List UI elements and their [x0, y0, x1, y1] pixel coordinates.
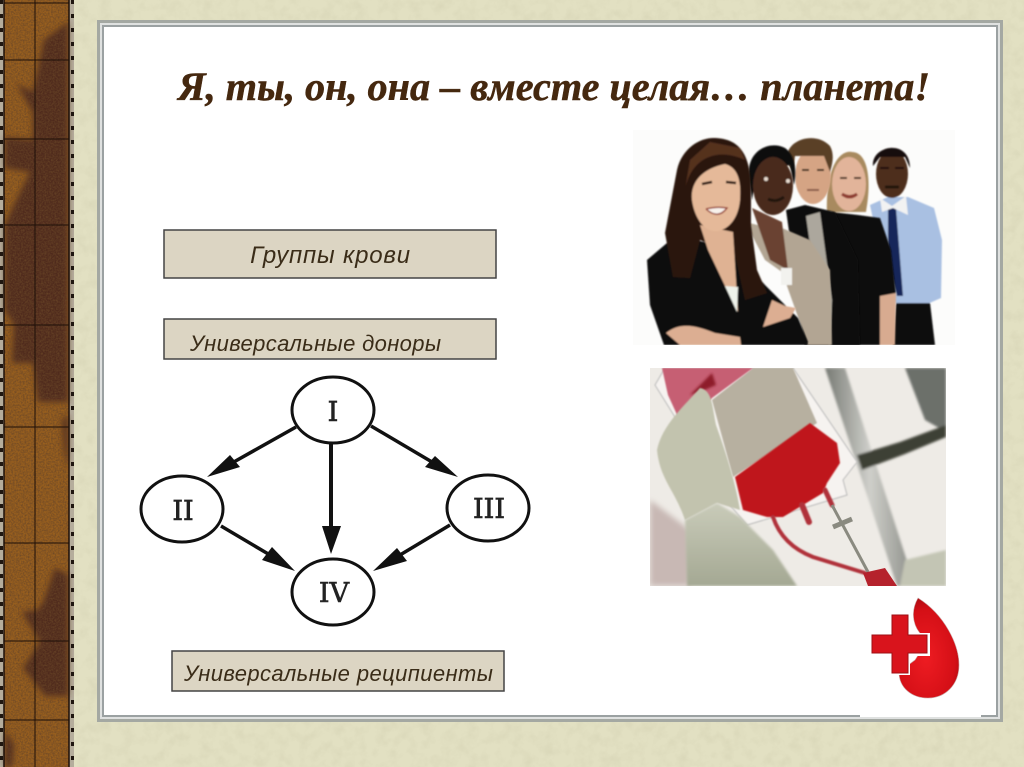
node I: I — [328, 397, 338, 428]
node III — [447, 475, 529, 541]
node IV — [292, 559, 374, 625]
node III: III — [473, 494, 505, 525]
node IV: IV — [319, 578, 350, 609]
label box: blood groups: Группы крови — [250, 242, 411, 269]
woman in beige jacket — [745, 145, 832, 345]
pink top of bag — [661, 368, 753, 414]
label box: universal recipients: Универсальные реципиенты — [183, 661, 493, 686]
node II — [141, 476, 223, 542]
photo: blood bag — [650, 368, 946, 586]
left soft background — [650, 500, 690, 586]
bag outline — [655, 368, 857, 525]
arrow: II to IV — [221, 526, 295, 571]
white patch over frame — [860, 700, 981, 717]
label box: blood groups — [164, 230, 496, 278]
arrow: III to IV — [373, 525, 450, 571]
photo: group of people — [646, 136, 943, 345]
decorative left border band — [0, 0, 74, 767]
icon: blood drop with cross — [870, 598, 959, 698]
blood group compatibility diagram — [141, 377, 529, 625]
gloved hand — [657, 388, 740, 520]
front woman — [647, 138, 808, 345]
right man — [870, 148, 942, 345]
tubes — [773, 490, 865, 573]
background pole and strap — [825, 368, 946, 586]
bag label — [712, 368, 817, 477]
man with grey tie — [786, 138, 860, 345]
label box: universal donors — [164, 319, 496, 359]
title: Я, ты, он, она – вместе целая… планета! — [176, 64, 930, 109]
label box: universal donors: Универсальные доноры — [189, 331, 441, 356]
arrow: I to III — [371, 426, 458, 477]
sleeve — [685, 503, 797, 586]
blood — [735, 423, 840, 517]
node I — [292, 377, 374, 443]
arrow: I to IV — [322, 443, 341, 554]
arrow: I to II — [207, 427, 296, 477]
node II: II — [172, 496, 194, 527]
label box: universal recipients — [172, 651, 504, 691]
blonde woman — [827, 152, 896, 345]
